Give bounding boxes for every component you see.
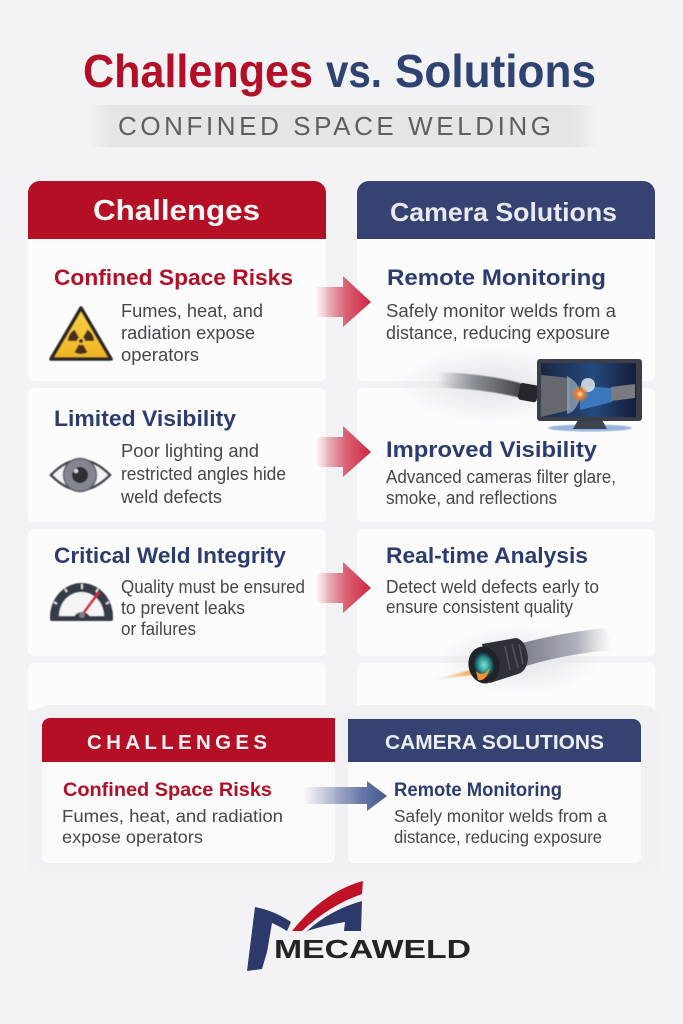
card: critical weld integrity: to prevent leaks — [121, 597, 245, 618]
arrow: visibility — [317, 426, 371, 477]
card: limited visibility: weld defects — [120, 486, 222, 507]
subtitle band — [88, 105, 598, 147]
bottom challenges card: expose operators — [62, 827, 203, 847]
title: Solutions — [395, 45, 596, 97]
card: confined space risks: radiation expose — [121, 322, 255, 343]
bottom camera solutions card: Remote Monitoring — [394, 780, 562, 801]
card: critical weld integrity: Critical Weld Integrity — [54, 543, 287, 568]
arrow: bottom blue — [303, 781, 387, 811]
card: real-time analysis — [357, 529, 655, 656]
card: remote monitoring — [357, 239, 655, 381]
card: improved visibility: smoke, and reflections — [386, 487, 557, 508]
card: remote monitoring: distance, reducing exposure — [386, 322, 610, 343]
card: confined space risks: Fumes, heat, and — [121, 300, 263, 321]
card: confined space risks: Confined Space Risks — [54, 265, 293, 290]
empty card left — [28, 663, 326, 710]
bottom challenges card: Confined Space Risks — [63, 780, 272, 801]
card: critical weld integrity: Quality must be ensured — [121, 576, 305, 597]
icon: radiation warning — [51, 308, 111, 359]
logo: Mecaweld — [247, 881, 471, 971]
card: confined space risks: operators — [121, 344, 199, 365]
subtitle band: CONFINED SPACE WELDING — [118, 111, 551, 141]
bottom camera solutions card — [348, 719, 641, 863]
card: remote monitoring: Safely monitor welds from a — [386, 300, 617, 321]
card: real-time analysis: Real-time Analysis — [386, 543, 588, 568]
card: confined space risks — [28, 239, 326, 381]
challenges header — [28, 181, 326, 239]
logo mark — [247, 881, 363, 971]
arrow: risks to monitoring — [317, 276, 371, 327]
card: improved visibility: Improved Visibility — [386, 437, 598, 462]
card: limited visibility: Poor lighting and — [121, 440, 259, 461]
card: improved visibility — [357, 388, 655, 522]
arrow: integrity to analysis — [317, 562, 371, 613]
challenges header: Challenges — [93, 195, 260, 227]
bottom camera solutions card: distance, reducing exposure — [394, 827, 602, 847]
empty card right — [357, 663, 655, 710]
card: critical weld integrity — [28, 529, 326, 656]
title: Challenges — [83, 45, 313, 97]
card: real-time analysis: Detect weld defects early to — [386, 576, 599, 597]
bottom challenges card: Fumes, heat, and radiation — [62, 806, 283, 826]
card: improved visibility: Advanced cameras filter glare, — [386, 466, 616, 487]
camera solutions header: Camera Solutions — [390, 197, 617, 227]
camera solutions header — [357, 181, 655, 239]
card: critical weld integrity: or failures — [121, 618, 196, 639]
icon: inspection camera — [432, 624, 613, 696]
card: remote monitoring: Remote Monitoring — [387, 265, 606, 290]
bottom camera solutions card: CAMERA SOLUTIONS — [385, 732, 604, 754]
card: limited visibility: restricted angles hide — [121, 463, 286, 484]
icon: camera cable and monitor — [395, 345, 642, 432]
panel: bottom comparison — [28, 705, 660, 872]
bottom challenges card: CHALLENGES — [87, 731, 267, 754]
title — [83, 45, 596, 97]
icon: eye — [51, 458, 110, 492]
title: vs. — [326, 45, 382, 97]
bottom camera solutions card: Safely monitor welds from a — [394, 806, 607, 826]
icon: gauge — [50, 583, 113, 621]
panel: challenges column — [28, 181, 326, 710]
logo: Mecaweld: MECAWELD — [274, 934, 471, 964]
card: limited visibility — [28, 388, 326, 522]
card: real-time analysis: ensure consistent quality — [386, 596, 574, 617]
card: limited visibility: Limited Visibility — [54, 406, 237, 431]
bottom challenges card — [42, 718, 335, 863]
panel: camera solutions column — [357, 181, 655, 710]
